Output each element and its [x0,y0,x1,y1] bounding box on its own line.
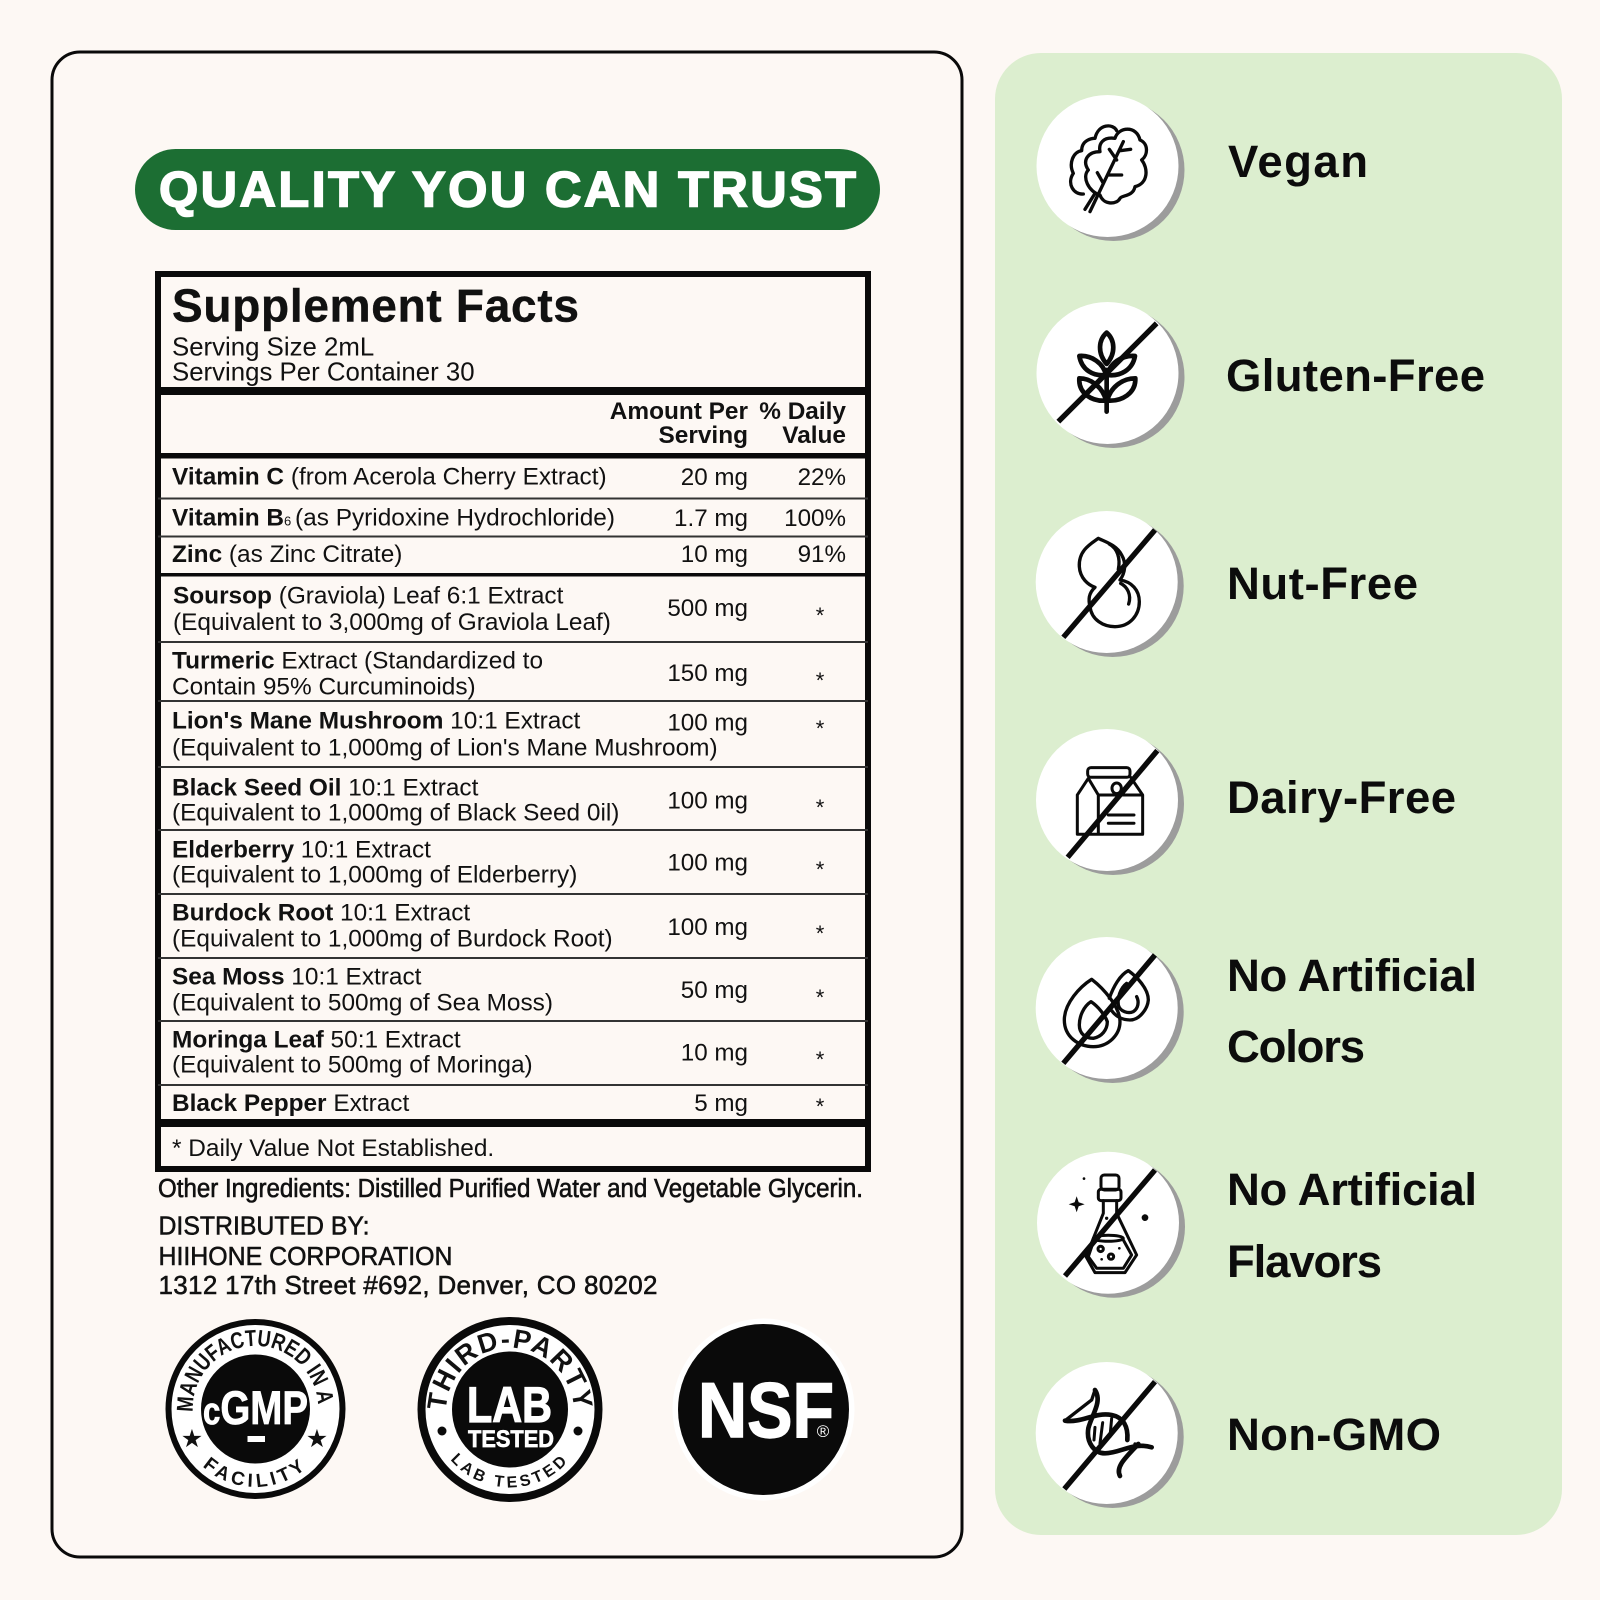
column headers: Value [782,422,846,449]
row: black seed oil: 100 mg [667,788,748,814]
row: turmeric: * [816,668,825,693]
row: black pepper: Black Pepper Extract [172,1090,409,1117]
attribute: no artificial flavors [1037,1152,1477,1298]
row: soursop: (Equivalent to 3,000mg of Graviola Leaf) [173,609,611,636]
table title: Supplement Facts [172,280,579,332]
heading: quality you can trust [135,149,880,230]
row: moringa leaf [172,1026,825,1078]
table footnote: * Daily Value Not Established. [172,1135,494,1162]
row: sea moss: * [816,985,825,1010]
row: black pepper: 5 mg [694,1090,748,1117]
row: lion's mane [172,708,825,762]
serving info: Serving Size 2mL [172,334,374,362]
row: turmeric: 150 mg [667,660,748,687]
row: zinc: 91% [798,541,846,568]
distributor address: DISTRIBUTED BY: [158,1210,370,1240]
column headers: Serving [659,422,748,449]
row: zinc: Zinc (as Zinc Citrate) [172,541,402,568]
label: No Artificial [1227,950,1477,1001]
heading: quality you can trust: QUALITY YOU CAN TRUST [159,160,856,218]
icon: wheat crossed out [1036,302,1184,448]
row: lion's mane: (Equivalent to 1,000mg of Lion's Mane Mushroom) [172,734,718,762]
badge: cGMP [166,1319,346,1499]
panel: label card [50,50,964,1558]
icon: nut crossed out [1036,511,1184,657]
distributor address [158,1210,658,1300]
badge: third-party lab tested: THIRD-PARTY [427,1329,593,1408]
badge: cGMP: ★ [181,1425,203,1453]
row: sea moss [172,964,825,1016]
row: vitamin b6 [172,504,846,532]
serving info [172,334,475,386]
row: vitamin c: 20 mg [681,464,748,491]
column headers: % Daily [759,398,846,425]
badge: cGMP: FACILITY [203,1456,302,1488]
label [1227,1164,1477,1287]
label: Colors [1227,1021,1365,1072]
row: soursop: 500 mg [667,595,748,622]
row: burdock root [172,900,825,952]
row: burdock root: 100 mg [667,914,748,941]
other ingredients: Other Ingredients: Distilled Purified Water and Vegetable Glycerin. [158,1175,863,1203]
row: burdock root: (Equivalent to 1,000mg of Burdock Root) [172,926,613,952]
label: Gluten-Free [1226,350,1485,401]
attribute: nut-free [1036,511,1418,657]
row: elderberry: Elderberry 10:1 Extract [172,836,431,864]
distributor address: 1312 17th Street #692, Denver, CO 80202 [158,1270,658,1300]
icon: drops crossed out [1036,937,1184,1083]
row: black pepper [172,1090,825,1119]
row: burdock root: * [816,921,825,946]
label: Dairy-Free [1227,772,1456,823]
badge: third-party lab tested: LAB TESTED [451,1452,565,1488]
row: burdock root: Burdock Root 10:1 Extract [172,900,470,926]
row: moringa leaf: (Equivalent to 500mg of Moringa) [172,1052,533,1078]
badge: cGMP: ★ [306,1425,328,1453]
row: moringa leaf: 10 mg [681,1040,748,1066]
row: turmeric: Turmeric Extract (Standardized to [172,648,543,674]
row: turmeric [172,648,825,700]
row: vitamin c [172,464,846,491]
attribute: gluten-free [1036,302,1485,448]
row: elderberry [172,836,825,888]
label: No Artificial [1227,1164,1477,1215]
attribute: vegan [1036,95,1368,241]
row: elderberry: 100 mg [667,850,748,876]
row: black seed oil [172,774,825,826]
row: zinc: 10 mg [681,541,748,568]
row: black seed oil: (Equivalent to 1,000mg of Black Seed 0il) [172,800,619,826]
row: moringa leaf: * [816,1047,825,1072]
row: lion's mane: Lion's Mane Mushroom 10:1 Extract [172,708,581,734]
row: sea moss: 50 mg [681,977,748,1004]
badge: third-party lab tested [418,1317,602,1502]
row: zinc [172,541,846,568]
row: lion's mane: 100 mg [667,710,748,736]
row: elderberry: (Equivalent to 1,000mg of Elderberry) [172,862,577,888]
row: soursop [173,582,825,636]
icon: leaf [1036,95,1184,241]
row: elderberry: * [816,857,825,882]
row: sea moss: (Equivalent to 500mg of Sea Moss) [172,990,553,1016]
icon: dna crossed out [1036,1362,1184,1508]
row: vitamin c: 22% [798,464,846,491]
column headers [610,398,846,449]
badge: NSF: NSF [698,1366,834,1454]
supplement facts table [158,274,868,1169]
label: Non-GMO [1227,1409,1441,1460]
row: sea moss: Sea Moss 10:1 Extract [172,964,422,990]
badge: cGMP: cGMP [203,1381,308,1434]
row: soursop: Soursop (Graviola) Leaf 6:1 Extract [173,582,564,610]
row: vitamin b6: 1.7 mg [674,505,748,532]
badge: third-party lab tested: TESTED [468,1426,554,1453]
badge: cGMP: MANUFACTURED IN A [176,1330,334,1411]
icon: milk carton crossed out [1036,729,1184,875]
row: soursop: * [816,603,825,628]
label: Vegan [1228,136,1368,187]
row: vitamin b6: 100% [784,505,846,532]
column headers: Amount Per [610,398,748,425]
panel: product attributes [995,53,1562,1535]
attribute: dairy-free [1036,729,1456,875]
attribute: no artificial colors [1036,937,1477,1083]
row: black seed oil: * [816,795,825,820]
badge: third-party lab tested: LAB [467,1377,552,1433]
label: Nut-Free [1227,558,1418,609]
row: black pepper: * [816,1094,825,1119]
label: Flavors [1227,1236,1382,1287]
badge: NSF [672,1318,854,1500]
row: vitamin c: Vitamin C (from Acerola Cherry Extract) [172,464,607,490]
row: lion's mane: * [816,716,825,741]
row: turmeric: Contain 95% Curcuminoids) [172,674,476,700]
badge: NSF: ® [817,1422,830,1441]
row: moringa leaf: Moringa Leaf 50:1 Extract [172,1026,461,1054]
row: black seed oil: Black Seed Oil 10:1 Extract [172,774,479,802]
attribute: non-gmo [1036,1362,1441,1508]
distributor address: HIIHONE CORPORATION [158,1241,452,1271]
serving info: Servings Per Container 30 [172,358,475,386]
row: vitamin b6: Vitamin B6 (as Pyridoxine Hydrochloride) [172,504,615,532]
label [1227,950,1477,1072]
icon: flask crossed out [1037,1152,1185,1298]
